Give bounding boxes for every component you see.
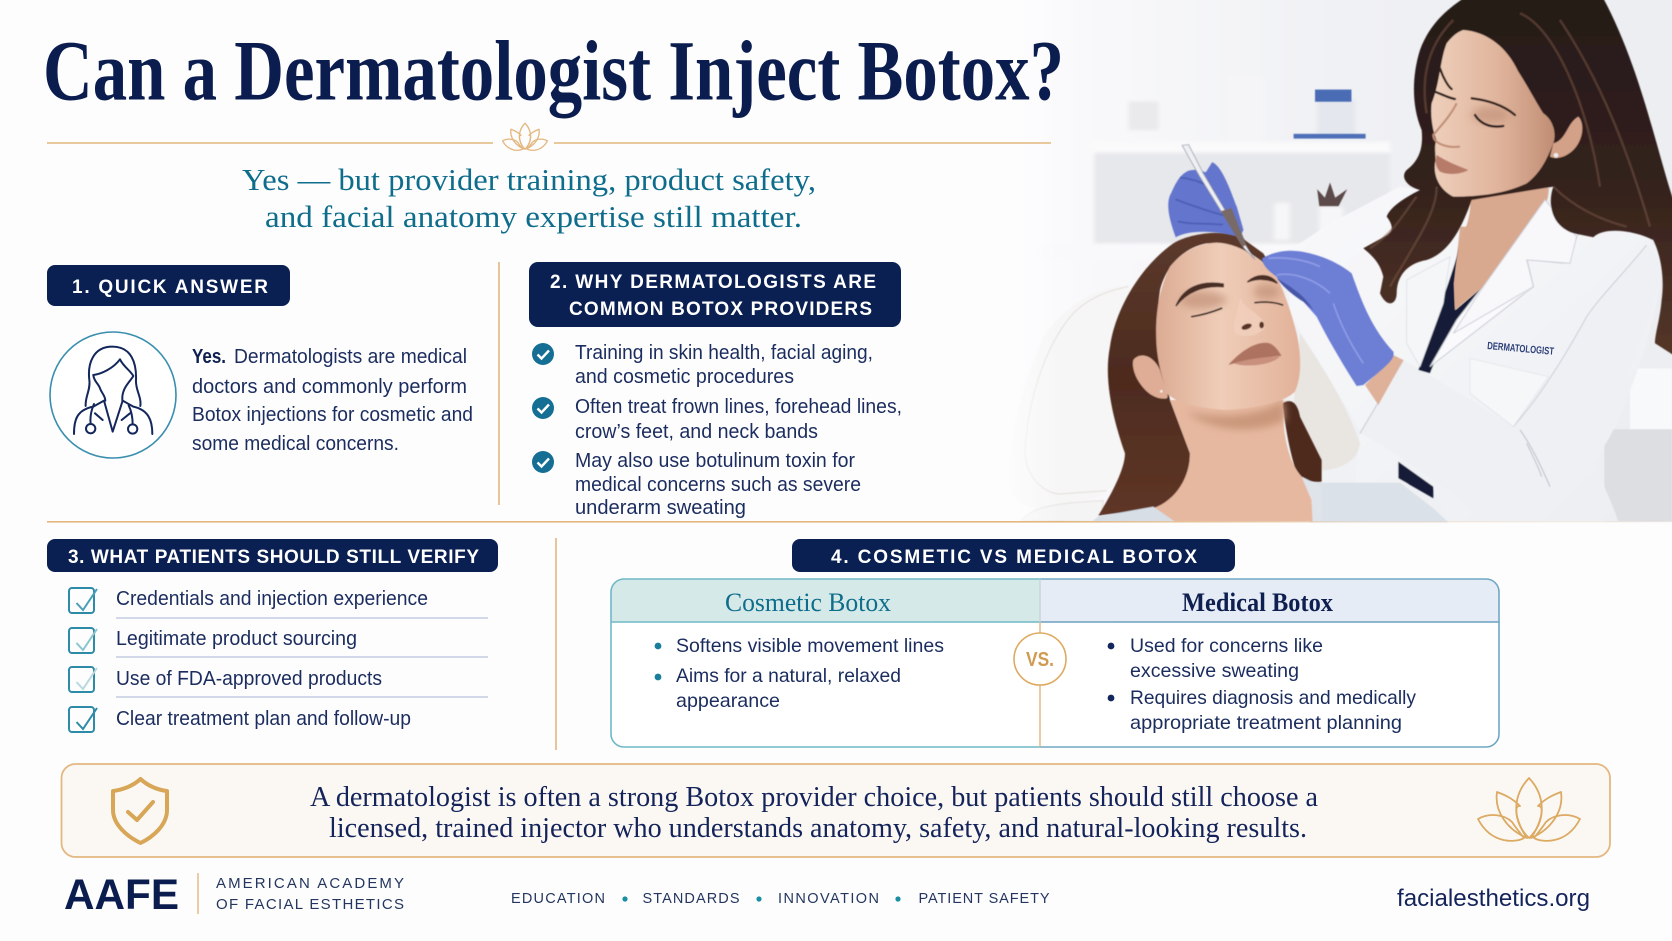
medical list	[1108, 635, 1416, 734]
text: quick answer: doctors and commonly perform	[192, 376, 467, 398]
medical list: excessive sweating	[1130, 660, 1299, 682]
vs badge	[1014, 633, 1066, 685]
title divider with lotus	[47, 123, 1051, 150]
logo: AAFE: OF FACIAL ESTHETICS	[216, 896, 404, 913]
footer	[64, 871, 1590, 919]
heading: quick answer	[47, 265, 290, 306]
heading: why dermatologists: COMMON BOTOX PROVIDERS	[569, 299, 872, 320]
text: quick answer: Botox injections for cosmetic and	[192, 404, 473, 426]
heading: why dermatologists	[529, 262, 901, 327]
cosmetic list: appearance	[676, 690, 780, 712]
dermatologist white coat	[1290, 187, 1662, 522]
cosmetic list	[655, 635, 944, 712]
cosmetic list: Aims for a natural, relaxed	[676, 665, 901, 687]
checklist: verify items: Credentials and injection experience	[116, 588, 428, 610]
text: bottom line: licensed, trained injector who understands anatomy, safety, and natural-looking results.	[329, 813, 1307, 844]
column header: cosmetic botox: Cosmetic Botox	[725, 588, 891, 617]
gloved hand on forehead	[1262, 251, 1394, 386]
patient head and neck	[1092, 233, 1322, 522]
heading: what patients should verify: 3. WHAT PATIENTS SHOULD STILL VERIFY	[68, 547, 479, 568]
check list: reasons: Often treat frown lines, forehead lines,	[575, 396, 902, 418]
dermatologist head and hair	[1363, 0, 1672, 355]
website: facialesthetics.org	[1397, 885, 1590, 912]
panel: what patients should verify	[47, 539, 498, 732]
panel: why dermatologists	[529, 262, 902, 519]
panel: cosmetic vs medical	[611, 539, 1499, 747]
logo: AAFE: AMERICAN ACADEMY	[216, 875, 404, 892]
icon: lotus	[1478, 778, 1580, 841]
text: quick answer	[192, 346, 473, 455]
column header: medical botox: Medical Botox	[1182, 588, 1333, 617]
footer values: STANDARDS	[642, 891, 740, 907]
text: quick answer: Yes.	[192, 346, 226, 368]
checklist: verify items: Clear treatment plan and follow-up	[116, 708, 411, 730]
comparison table	[611, 579, 1499, 747]
text: bottom line: A dermatologist is often a strong Botox provider choice, but patients should still choose a	[310, 782, 1319, 813]
patient chair	[1009, 285, 1167, 522]
heading: why dermatologists: 2. WHY DERMATOLOGISTS ARE	[550, 272, 876, 293]
callout: bottom line	[62, 764, 1610, 857]
heading: cosmetic vs medical: 4. COSMETIC VS MEDICAL BOTOX	[831, 547, 1197, 568]
subtitle: and facial anatomy expertise still matter.	[265, 199, 802, 234]
heading: quick answer: 1. QUICK ANSWER	[72, 277, 268, 298]
text: bottom line	[310, 782, 1319, 844]
footer values: EDUCATION	[511, 891, 605, 907]
check list: reasons: and cosmetic procedures	[575, 366, 794, 388]
check list: reasons: crow’s feet, and neck bands	[575, 421, 818, 443]
panel: quick answer	[47, 265, 473, 458]
subtitle: Yes — but provider training, product safety,	[242, 162, 816, 197]
check list: reasons: medical concerns such as severe	[575, 474, 861, 496]
check list: reasons: Training in skin health, facial aging,	[575, 342, 873, 364]
icon: shield with check	[113, 779, 167, 843]
footer values: INNOVATION	[778, 891, 879, 907]
heading: cosmetic vs medical	[792, 539, 1235, 572]
photo: dermatologist injecting a patient	[1000, 0, 1672, 522]
checklist: verify items: Legitimate product sourcing	[116, 628, 357, 650]
gloved hand holding syringe	[1168, 145, 1255, 260]
vs badge: VS.	[1026, 649, 1054, 671]
footer values: PATIENT SAFETY	[918, 891, 1050, 907]
text: quick answer: Dermatologists are medical	[234, 346, 467, 368]
medical list: Requires diagnosis and medically	[1130, 687, 1416, 709]
heading: what patients should verify	[47, 539, 498, 572]
cosmetic list: Softens visible movement lines	[676, 635, 944, 657]
checklist: verify items: Use of FDA-approved products	[116, 668, 382, 690]
title: Can a Dermatologist Inject Botox?	[43, 22, 1064, 118]
check list: reasons: underarm sweating	[575, 497, 746, 519]
footer values	[511, 891, 1050, 907]
check list: reasons: May also use botulinum toxin for	[575, 450, 855, 472]
medical list: Used for concerns like	[1130, 635, 1323, 657]
coat label: DERMATOLOGIST	[1487, 340, 1555, 358]
medical list: appropriate treatment planning	[1130, 712, 1402, 734]
text: quick answer: some medical concerns.	[192, 433, 399, 455]
clinic background with shelves	[1000, 0, 1672, 522]
logo: AAFE: AAFE	[64, 871, 179, 919]
subtitle	[242, 162, 816, 234]
icon: doctor in circle	[50, 332, 176, 458]
logo: AAFE	[64, 871, 404, 919]
checklist: verify items	[69, 588, 488, 732]
check list: reasons	[532, 342, 902, 519]
